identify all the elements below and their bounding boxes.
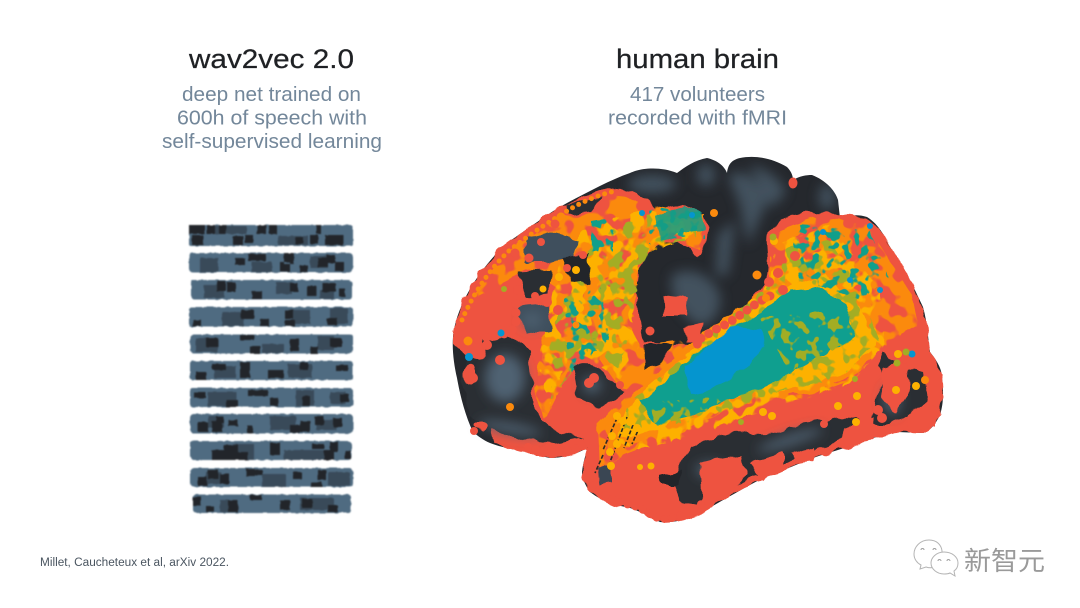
text block: wav2vec description: 600h of speech with	[177, 106, 367, 130]
text block: wav2vec description: deep net trained on	[182, 83, 361, 106]
activation: orange mottling	[470, 195, 918, 470]
icon: chat bubbles	[914, 540, 958, 576]
red activation blobs over gaps	[464, 295, 939, 505]
watermark text: 新智元	[964, 541, 1045, 578]
activation: yellow mottling	[540, 210, 885, 450]
text block: wav2vec description	[162, 83, 382, 153]
grey highlights inside gaps	[478, 313, 900, 477]
activation: central teal region	[640, 288, 856, 424]
text block: human brain description	[608, 83, 787, 130]
yellow dots in temporal pole	[606, 412, 654, 470]
yellow-green flecks over teal	[650, 310, 856, 424]
heading: human brain: human brain	[616, 44, 779, 74]
text block: wav2vec description: self-supervised learning	[162, 130, 382, 153]
scattered red dots along the cortex edge	[478, 296, 770, 519]
heading: wav2vec 2.0: wav2vec 2.0	[188, 44, 354, 74]
activation: red base layer	[453, 188, 943, 522]
orange dotted rim of frontal lobe	[462, 191, 615, 320]
chart: brain activation map	[453, 157, 943, 522]
chart: wav2vec activation stripes	[189, 225, 353, 513]
brain silhouette	[453, 157, 943, 522]
activation: teal patches in upper regions	[565, 208, 890, 375]
cortex shading: gyri highlights	[628, 164, 835, 326]
dark sulci and grey gaps in activation	[462, 198, 926, 506]
text block: human brain description: 417 volunteers	[630, 83, 765, 106]
scanner stripes in temporal pole	[595, 417, 640, 473]
activation: arch teal	[655, 206, 703, 240]
activation: olive and green mottling	[550, 215, 880, 430]
citation: Millet, Caucheteux et al, arXiv 2022.	[40, 557, 229, 569]
activation: central blue core	[684, 326, 766, 394]
text block: human brain description: recorded with fMRI	[608, 106, 787, 130]
activation: solid orange rim around central region	[606, 268, 882, 452]
watermark: WeChat logo and name	[914, 540, 1045, 578]
individual activation dots	[464, 178, 929, 435]
activation: solid yellow band around central region	[618, 275, 876, 438]
